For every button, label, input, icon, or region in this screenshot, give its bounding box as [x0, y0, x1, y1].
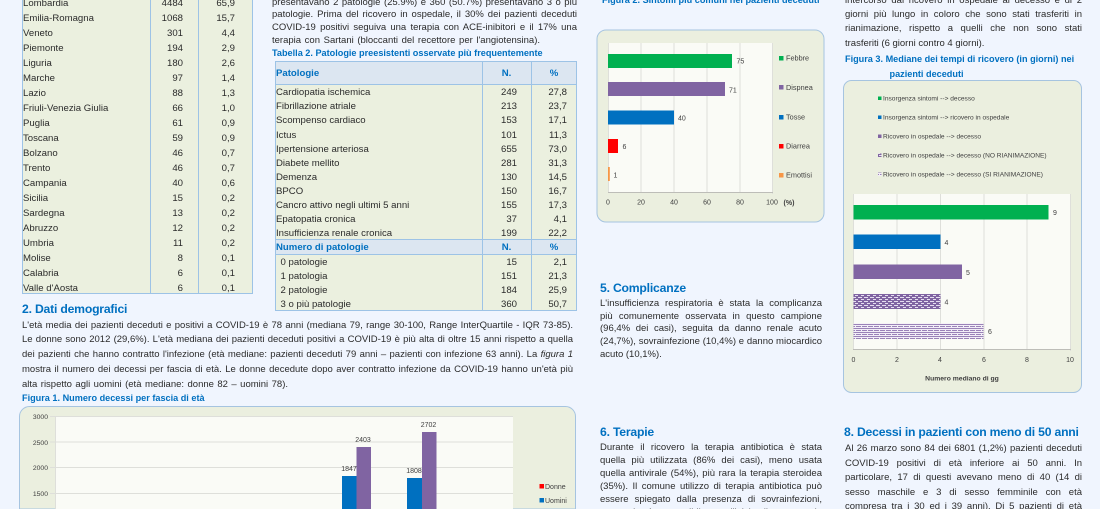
bar values: 1847: [341, 466, 357, 473]
table 1: decessi per regione: 0,7: [222, 148, 235, 159]
bars: mediane: [854, 205, 1048, 339]
table 1: decessi per regione: Friuli-Venezia Giulia: [23, 103, 108, 114]
axis title: Numero mediano di gg: [925, 376, 999, 382]
table 2: patologie preesistenti: 50,7: [548, 299, 567, 310]
table 1: decessi per regione: [22, 0, 253, 294]
bar values: 71: [729, 88, 737, 94]
table 1: decessi per regione: Toscana: [23, 133, 59, 144]
x axis labels: 10: [1066, 357, 1074, 364]
table 2: patologie preesistenti: Epatopatia cronica: [276, 214, 355, 225]
x axis labels: [852, 357, 1074, 364]
legend: Ricovero in ospedale --> decesso: [883, 134, 981, 140]
legend: Diarrea: [786, 142, 811, 150]
legend: Ricovero in ospedale --> decesso (NO RIANIMAZIONE): [883, 152, 1047, 160]
table 1: decessi per regione: Molise: [23, 253, 51, 264]
table 2: patologie preesistenti: Diabete mellito: [276, 158, 339, 169]
table 2: patologie preesistenti: 199: [501, 228, 517, 239]
bar values: 1808: [406, 468, 422, 475]
table 2: patologie preesistenti: 23,7: [548, 101, 567, 112]
text block: decessi sotto 50 anni: sesso maschile e 3 di sesso femminile con età: [845, 486, 1082, 498]
table 2: patologie preesistenti: Demenza: [276, 172, 317, 183]
bar values: 4: [944, 300, 948, 306]
text block: tempi di ricovero: giorni più lungo in coloro che sono stati trasferiti in: [845, 9, 1082, 20]
table 2: patologie preesistenti: 16,7: [548, 186, 567, 197]
bar values: 2702: [421, 422, 436, 429]
table 2: patologie preesistenti: Insufficienza renale cronica: [276, 228, 392, 239]
table 1: decessi per regione: 2,9: [222, 43, 235, 54]
bar values: 4: [944, 240, 948, 247]
text block: complicanze: acuto (10,1%).: [600, 349, 662, 360]
y axis labels: 2000: [33, 465, 48, 472]
table 2: patologie preesistenti: 101: [501, 130, 517, 141]
table 1: decessi per regione: 180: [167, 58, 183, 69]
text block: dati demografici: alta rispetto agli uomini (età mediane: donne 82 – uomini 78).: [22, 379, 288, 390]
legend: [779, 54, 814, 180]
table 2: patologie preesistenti: 17,3: [548, 200, 567, 211]
table 2: patologie preesistenti: 155: [501, 200, 517, 211]
table 2: patologie preesistenti: 249: [501, 87, 517, 98]
table 1: decessi per regione: Puglia: [23, 118, 50, 129]
text block: dati demografici: L'età media dei pazienti deceduti e positivi a COVID-19 è 78 anni (mediana 79, range 30-100, Range InterQuartile - IQR 73-85).: [22, 320, 573, 331]
table 2: patologie preesistenti: 360: [501, 299, 517, 310]
bar values: [341, 422, 436, 475]
heading: 5. Complicanze: 5. Complicanze: [600, 281, 686, 295]
text block: complicanze: L'insufficienza respiratoria è stata la complicanza: [600, 298, 822, 309]
table 2: patologie preesistenti: 2 patologie: [280, 285, 327, 296]
table 1: decessi per regione: 301: [167, 28, 183, 39]
table 1: decessi per regione: 66: [172, 103, 183, 114]
legend: Emottisi: [786, 170, 812, 180]
bar values: 2403: [355, 437, 371, 444]
table 2: patologie preesistenti: 25,9: [548, 285, 567, 296]
text block: decessi sotto 50 anni: [845, 443, 1082, 509]
table 2: patologie preesistenti: 281: [501, 158, 517, 169]
text block: decessi sotto 50 anni: Al 26 marzo sono 84 dei 6801 (1,2%) pazienti deceduti: [845, 443, 1082, 454]
x axis labels: 4: [938, 357, 942, 364]
text block: complicanze: (24,7%), sovrainfezione (10,4%) e danno miocardico: [600, 336, 822, 347]
table 2: patologie preesistenti: Ictus: [276, 130, 296, 141]
legend: Febbre: [786, 54, 809, 62]
bar values: 5: [966, 270, 970, 277]
table 1: decessi per regione: 6: [178, 268, 183, 279]
table 2: patologie preesistenti: 11,3: [549, 130, 567, 141]
table 1: decessi per regione: Emilia-Romagna: [23, 13, 94, 24]
table 1: decessi per regione: 88: [172, 88, 183, 99]
x axis labels: 6: [982, 357, 986, 364]
table 2: patologie preesistenti: %: [550, 242, 558, 253]
text block: dati demografici: [22, 320, 574, 390]
table 1: decessi per regione: Trento: [23, 163, 50, 174]
text block: tempi di ricovero: trasferiti (6 giorni contro 4 giorni).: [845, 38, 984, 49]
table 1: decessi per regione: 2,6: [222, 58, 235, 69]
table 1: decessi per regione: Sardegna: [23, 208, 65, 219]
table 2: patologie preesistenti: Scompenso cardiaco: [276, 115, 366, 126]
table 1: decessi per regione: Umbria: [23, 238, 54, 249]
table 1: decessi per regione: 1,3: [222, 88, 235, 99]
text block: terapie: quella antivirale (54%), più rara la terapia steroidea: [600, 468, 822, 479]
y axis labels: 2500: [33, 440, 48, 447]
legend: Insorgenza sintomi --> decesso: [883, 96, 975, 102]
table 1: decessi per regione: Marche: [23, 73, 55, 84]
table 1: decessi per regione: 15: [172, 193, 183, 204]
x axis labels: 20: [637, 200, 645, 206]
table 1: decessi per regione: Lazio: [23, 88, 46, 99]
table 1: decessi per regione: 61: [172, 118, 183, 129]
table 2: patologie preesistenti: Ipertensione arteriosa: [276, 144, 369, 155]
table 1: decessi per regione: 1,0: [222, 103, 235, 114]
table 1: decessi per regione: 1,4: [222, 73, 235, 84]
bar values: [614, 58, 744, 180]
bar values: 40: [678, 116, 686, 122]
table 2: patologie preesistenti: 73,0: [548, 144, 567, 155]
bar values: 6: [622, 144, 626, 151]
y axis labels: 1500: [33, 491, 48, 498]
bar values: 1: [614, 172, 618, 180]
y axis labels: 3000: [33, 414, 48, 421]
table 1: decessi per regione: 8: [178, 253, 183, 264]
chart panel: Figura 1 decessi per età: [20, 406, 576, 509]
legend: Uomini: [545, 498, 567, 505]
table 1: decessi per regione: 0,9: [222, 118, 235, 129]
x axis labels: 0: [852, 357, 856, 364]
text block: decessi sotto 50 anni: COVID-19 positivi di età inferiore ai 50 anni. In: [845, 458, 1082, 468]
table 1: decessi per regione: Veneto: [23, 28, 53, 39]
text block: complicanze: [600, 298, 822, 360]
table 2: patologie preesistenti: BPCO: [276, 186, 303, 197]
table 2: patologie preesistenti: 151: [501, 271, 517, 282]
x axis labels: 40: [670, 200, 678, 206]
table 2: patologie preesistenti: N.: [502, 242, 511, 253]
text block: patologie preesistenti: patologie. Prima del ricovero in ospedale, il 30% dei pazienti deceduti: [272, 9, 577, 20]
text block: patologie preesistenti: COVID-19 positivi seguiva una terapia con ACE-inibitori e il 17% una: [272, 22, 577, 33]
table 1: decessi per regione: 0,2: [222, 238, 235, 249]
table 1: decessi per regione: Sicilia: [23, 193, 48, 204]
table 1: decessi per regione: 59: [172, 133, 183, 144]
heading: 8. Decessi in pazienti con meno di 50 anni: 8. Decessi in pazienti con meno di 50 anni: [844, 425, 1079, 439]
table 1: decessi per regione: 40: [172, 178, 183, 189]
heading: 6. Terapie: 6. Terapie: [600, 425, 654, 439]
text block: dati demografici: mostra il numero dei decessi per fascia di età. Le donne decedute dopo aver contratto infezione da COVID-19 hanno un'età più: [22, 364, 573, 375]
figure title: Figura 3: pazienti deceduti: [890, 69, 964, 79]
table 1: decessi per regione: Campania: [23, 178, 67, 189]
figure title: Figura 3: Figura 3. Mediane dei tempi di ricovero (in giorni) nei: [845, 54, 1074, 64]
table 2: patologie preesistenti: 22,2: [548, 228, 567, 239]
table 1: decessi per regione: 0,7: [222, 163, 235, 174]
x axis labels: 8: [1025, 357, 1029, 364]
table 1: decessi per regione: Liguria: [23, 58, 52, 69]
bar values: 9: [1053, 210, 1057, 217]
text block: patologie preesistenti: terapia con Sartani (bloccanti del recettore per l'angiotensina).: [272, 35, 540, 46]
x axis labels: 0: [606, 200, 610, 206]
table 1: decessi per regione: 0,2: [222, 208, 235, 219]
table 2: patologie preesistenti: 31,3: [548, 158, 567, 169]
table 2: patologie preesistenti: 0 patologie: [280, 257, 327, 268]
table 2: patologie preesistenti: 15: [506, 257, 517, 268]
text block: dati demografici: Le donne sono 2012 (29,6%). L'età mediana dei pazienti deceduti positivi a COVID-19 è più alta di oltre 15 anni rispetto a quella: [22, 334, 573, 345]
table 2: patologie preesistenti: Cardiopatia ischemica: [276, 87, 370, 98]
table 1: decessi per regione: 194: [167, 43, 183, 54]
table 1: decessi per regione: 0,1: [222, 253, 235, 264]
table 2: patologie preesistenti: N.: [502, 68, 511, 79]
figure title: Figura 3: [845, 54, 1074, 79]
table 1: decessi per regione: 97: [172, 73, 183, 84]
figure title: Figura 1: Figura 1. Numero decessi per fascia di età: [22, 393, 205, 403]
table 1: decessi per regione: 46: [172, 163, 183, 174]
chart panel: Figura 3 mediane tempi di ricovero: [844, 80, 1082, 392]
table 1: decessi per regione: Abruzzo: [23, 223, 58, 234]
table 1: decessi per regione: Bolzano: [23, 148, 58, 159]
x axis labels: 100: [766, 200, 778, 206]
table 1: decessi per regione: Piemonte: [23, 43, 64, 54]
text block: terapie: Durante il ricovero la terapia antibiotica è stata: [600, 442, 822, 453]
table 2: patologie preesistenti: 17,1: [548, 115, 567, 126]
table 2: patologie preesistenti: 184: [501, 285, 517, 296]
table 1: decessi per regione: 4,4: [222, 28, 235, 39]
text block: terapie: quella più utilizzata (86% dei casi), meno usata: [600, 455, 822, 466]
bar values: 6: [988, 329, 992, 336]
table 2: patologie preesistenti: 37: [506, 214, 517, 225]
bars: fascia di età: [342, 432, 436, 509]
x axis labels: 60: [703, 200, 711, 206]
chart panel: Figura 2 sintomi: [597, 30, 824, 222]
bar values: 75: [736, 58, 744, 66]
text block: tempi di ricovero: rianimazione, rispetto a quelli che non sono stati: [845, 23, 1082, 34]
table 2: patologie preesistenti: Fibrillazione atriale: [276, 101, 356, 112]
table 2: patologie preesistenti: Numero di patologie: [276, 242, 369, 253]
text block: patologie preesistenti: [272, 0, 578, 46]
table 2: patologie preesistenti: 130: [501, 172, 517, 183]
legend: [540, 484, 567, 505]
legend: Donne: [545, 484, 566, 491]
table 2: patologie preesistenti: 213: [501, 101, 517, 112]
table 2: patologie preesistenti: 3 o più patologie: [280, 299, 351, 310]
heading: 2. Dati demografici: 2. Dati demografici: [22, 302, 127, 316]
table 1: decessi per regione: 0,2: [222, 193, 235, 204]
table 2: patologie preesistenti: 1 patologia: [280, 271, 327, 282]
table 2: patologie preesistenti: 2,1: [554, 257, 567, 268]
table 2: patologie preesistenti: 153: [501, 115, 517, 126]
table 2: patologie preesistenti: Patologie: [276, 68, 319, 79]
table 2: patologie preesistenti: %: [550, 68, 558, 79]
bars: sintomi: [608, 54, 732, 181]
text block: terapie: (35%). Il comune utilizzo di terapia antibiotica può: [600, 481, 822, 492]
text block: complicanze: più comunemente osservata in questo campione: [600, 311, 822, 322]
text block: terapie: essere spiegato dalla presenza di sovrainfezioni,: [600, 494, 822, 505]
table 1: decessi per regione: 11: [173, 238, 183, 249]
table 2: patologie preesistenti: 4,1: [554, 214, 567, 225]
legend: Dispnea: [786, 83, 814, 92]
table 2: patologie preesistenti: 27,8: [548, 87, 567, 98]
table 1: decessi per regione: 46: [172, 148, 183, 159]
text block: complicanze: (96,4% dei casi), seguita da danno renale acuto: [600, 323, 822, 334]
table 1: decessi per regione: 15,7: [216, 13, 235, 24]
table 1: decessi per regione: 0,2: [222, 223, 235, 234]
legend: Tosse: [786, 112, 805, 122]
table 1: decessi per regione: 12: [172, 223, 183, 234]
table 1: decessi per regione: 0,9: [222, 133, 235, 144]
table 2: patologie preesistenti: [275, 61, 577, 310]
legend: Insorgenza sintomi --> ricovero in ospedale: [883, 114, 1010, 122]
x axis labels: 2: [895, 357, 899, 364]
table 2: patologie preesistenti: Cancro attivo negli ultimi 5 anni: [276, 200, 409, 211]
text block: decessi sotto 50 anni: particolare, 17 di questi avevano meno di 40 (14 di: [845, 472, 1082, 483]
table 1: decessi per regione: 13: [172, 208, 183, 219]
table 2: patologie preesistenti: 21,3: [548, 271, 567, 282]
text block: dati demografici: dei pazienti che hanno contratto l'infezione (età mediane: pazienti deceduti 79 anni – pazienti con infezione 63 anni). La figura 1: [22, 349, 573, 360]
table 1: decessi per regione: 0,6: [222, 178, 235, 189]
table 1: decessi per regione: 0,1: [222, 268, 235, 279]
table title: Tabella 2: Tabella 2. Patologie preesistenti osservate più frequentemente: [272, 48, 543, 58]
legend: Ricovero in ospedale --> decesso (SI RIANIMAZIONE): [883, 172, 1043, 178]
table 2: patologie preesistenti: 655: [501, 144, 517, 155]
table 2: patologie preesistenti: 150: [501, 186, 517, 197]
table 2: patologie preesistenti: 14,5: [548, 172, 567, 183]
text block: terapie: [600, 442, 822, 509]
bar values: [944, 210, 1057, 336]
table 1: decessi per regione: Calabria: [23, 268, 59, 279]
table 1: decessi per regione: 1068: [162, 13, 183, 24]
y axis labels: [33, 414, 48, 498]
x axis labels: (%): [784, 200, 794, 207]
x axis labels: [606, 200, 794, 207]
text block: tempi di ricovero: [845, 0, 1082, 49]
x axis labels: 80: [736, 200, 744, 206]
legend: [878, 96, 1047, 178]
